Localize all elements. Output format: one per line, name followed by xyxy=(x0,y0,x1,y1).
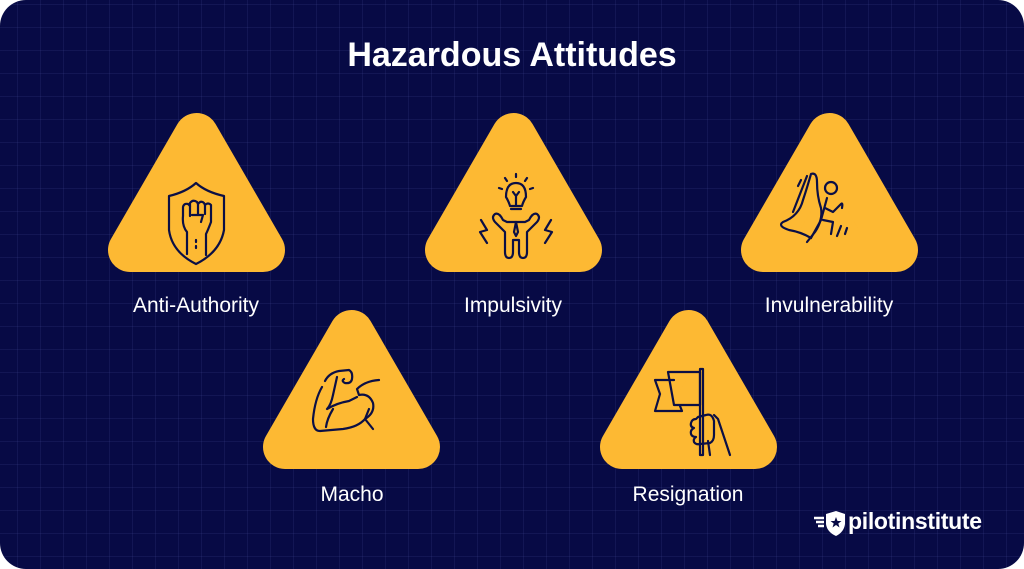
icon: person with lightbulb xyxy=(480,174,552,258)
icon panel: anti-authority xyxy=(130,135,263,264)
logo: pilotinstitute: pilotinstitute xyxy=(848,508,982,534)
icon: figure with cape xyxy=(781,174,847,242)
label: macho: Macho xyxy=(320,483,384,506)
icon panel: resignation xyxy=(622,332,755,455)
title: Hazardous Attitudes xyxy=(347,36,677,74)
label: resignation: Resignation xyxy=(633,483,743,506)
label: anti-authority: Anti-Authority xyxy=(133,294,259,317)
icon: hand holding flag xyxy=(655,369,730,455)
icon panel: invulnerability xyxy=(763,135,896,250)
label: invulnerability: Invulnerability xyxy=(765,294,893,317)
icon panel: macho xyxy=(285,332,418,447)
icon: fist in shield xyxy=(169,183,224,264)
icon: flexed arm xyxy=(313,370,379,431)
icon panel: impulsivity xyxy=(447,135,580,258)
label: impulsivity: Impulsivity xyxy=(464,294,562,317)
